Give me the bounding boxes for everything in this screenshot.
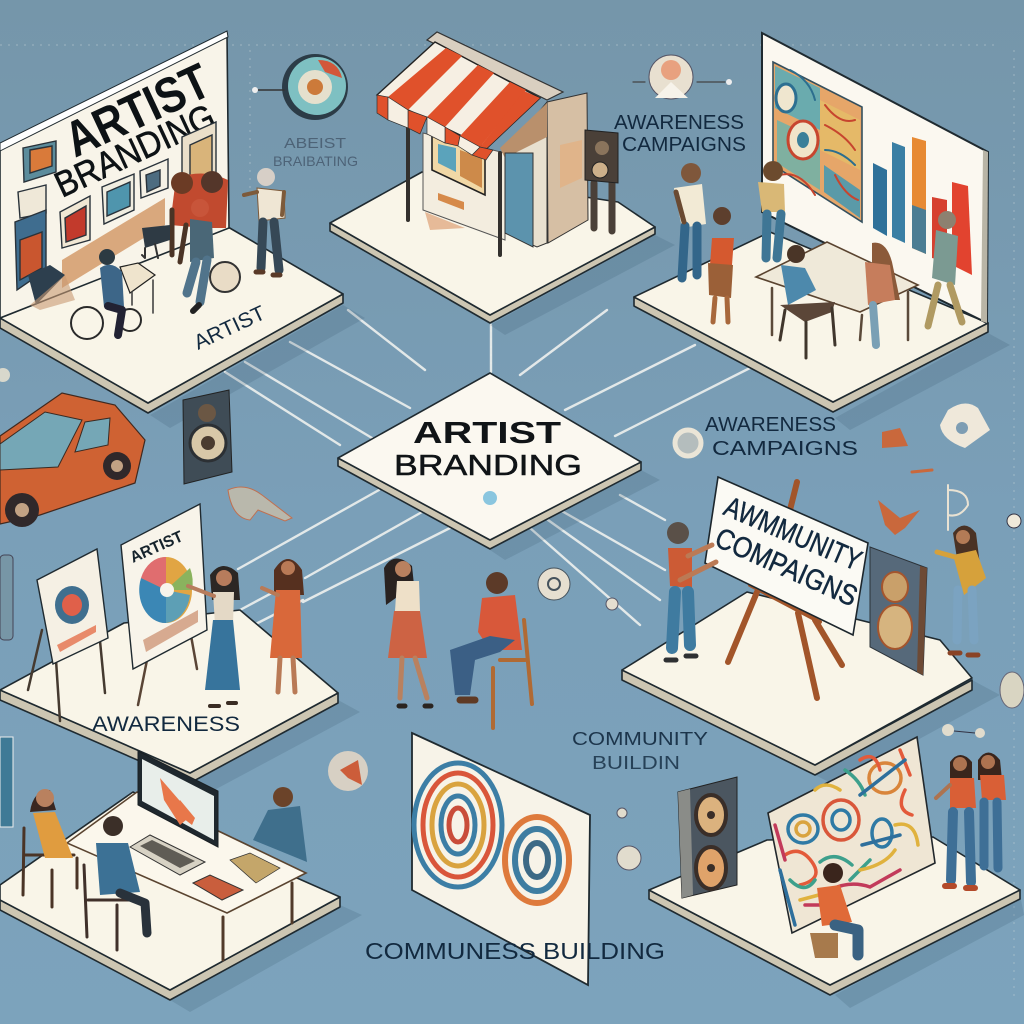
panel: artist branding studio <box>0 31 343 413</box>
label: awareness campaigns top: AWARENESS <box>614 112 744 134</box>
seated woman <box>865 243 900 345</box>
panel: easel campaign stage <box>622 477 986 775</box>
label: communess building: COMMUNESS BUILDING <box>365 938 665 964</box>
standing person <box>187 199 240 311</box>
label: artist: ARTIST <box>190 301 269 355</box>
label: awareness campaigns mid: AWARENESS <box>705 414 836 436</box>
woman at chart <box>928 211 962 326</box>
shop building <box>423 133 505 240</box>
center dot <box>483 491 497 505</box>
awning valance <box>377 95 493 160</box>
connector lines <box>225 310 750 632</box>
seated man <box>450 572 532 728</box>
panel: spiral painting <box>412 733 590 985</box>
icon: right edge dots <box>1000 514 1024 708</box>
label: garbled artist branding: BRAIBATING <box>273 153 358 169</box>
panel: central hub <box>338 373 641 549</box>
door <box>505 153 533 247</box>
label: community building: COMMUNITY <box>572 729 708 749</box>
easel <box>728 482 842 698</box>
woman at sign <box>666 522 716 660</box>
icon: floating paint swatch <box>228 487 292 521</box>
platform <box>634 297 988 412</box>
platform <box>622 670 972 775</box>
seated man <box>780 245 835 358</box>
label: awareness campaigns top <box>614 112 746 156</box>
seated woman <box>23 789 77 907</box>
standing woman <box>708 207 734 322</box>
panel: market stall <box>330 32 655 323</box>
sign: AWMMUNITY <box>719 491 866 577</box>
woven wall panel <box>62 198 165 288</box>
sketchbook <box>193 875 243 900</box>
woman in skirt <box>384 558 431 706</box>
seated painter <box>810 863 858 958</box>
label: awareness campaigns mid <box>705 414 858 460</box>
label: community building <box>572 729 708 773</box>
wall art frames <box>15 122 216 290</box>
red group <box>142 171 228 262</box>
illustration: orange car <box>0 393 145 527</box>
illustration: conversation pair <box>384 558 532 728</box>
bar chart <box>873 137 972 275</box>
platform <box>330 223 655 323</box>
panel: awareness posters <box>0 504 338 783</box>
speaker <box>678 777 737 898</box>
label: garbled artist branding <box>273 135 358 169</box>
panel: campaign gallery <box>634 33 988 412</box>
painting <box>773 62 862 222</box>
wall <box>762 33 988 323</box>
speaker <box>870 547 927 675</box>
presenting woman <box>188 566 240 706</box>
table <box>756 242 918 312</box>
seated man <box>84 816 147 950</box>
platform <box>0 690 338 783</box>
icon: edge shapes left <box>0 368 13 827</box>
platform <box>649 890 1020 995</box>
mural <box>768 737 935 933</box>
side poster <box>560 140 582 188</box>
dark bench <box>28 265 65 305</box>
center heading <box>394 415 582 482</box>
man in suit <box>253 787 307 862</box>
label: awareness campaigns top: CAMPAIGNS <box>622 134 746 156</box>
shop sign and paint <box>438 193 464 210</box>
speaker left <box>183 390 232 484</box>
icon: round dial <box>252 54 348 120</box>
desk <box>223 883 292 960</box>
center heading: ARTIST <box>413 415 561 450</box>
table and wheelchair artist <box>71 249 155 339</box>
speaker <box>594 183 612 231</box>
label: awareness campaigns mid: CAMPAIGNS <box>712 438 858 460</box>
standing man in tan <box>758 161 785 258</box>
wall heading: ARTIST <box>56 53 218 168</box>
label: garbled artist branding: ABEIST <box>284 135 346 152</box>
poles <box>408 123 500 255</box>
icon: small badges center <box>328 568 618 791</box>
panel: mural stage <box>649 737 1020 995</box>
small poster <box>28 549 108 721</box>
platform <box>0 897 340 1000</box>
keyboard <box>130 835 205 875</box>
panel: design desk <box>0 751 340 1000</box>
platform <box>0 294 343 413</box>
icon: ring badge <box>675 430 701 456</box>
woman pair <box>936 755 976 888</box>
label: awareness: AWARENESS <box>92 713 240 736</box>
sign <box>705 477 868 635</box>
sign: COMPAIGNS <box>710 522 862 613</box>
standing man <box>244 168 285 275</box>
woman in orange dress <box>262 559 304 692</box>
woman in yellow <box>937 526 986 655</box>
icon: head portrait badge <box>633 55 732 99</box>
awning <box>377 42 540 148</box>
computer <box>138 751 218 847</box>
icon: small connector dots <box>617 724 985 870</box>
platform shadows <box>150 235 1024 1012</box>
label: community building: BUILDIN <box>592 753 680 773</box>
wall heading: BRANDING <box>48 95 221 205</box>
large poster <box>121 504 207 705</box>
large poster: ARTIST <box>128 528 186 567</box>
window <box>432 135 485 195</box>
icon: floating shapes <box>878 403 990 535</box>
wall <box>0 34 229 318</box>
standing man <box>674 163 706 278</box>
center heading: BRANDING <box>394 450 582 482</box>
ridge <box>427 32 563 100</box>
